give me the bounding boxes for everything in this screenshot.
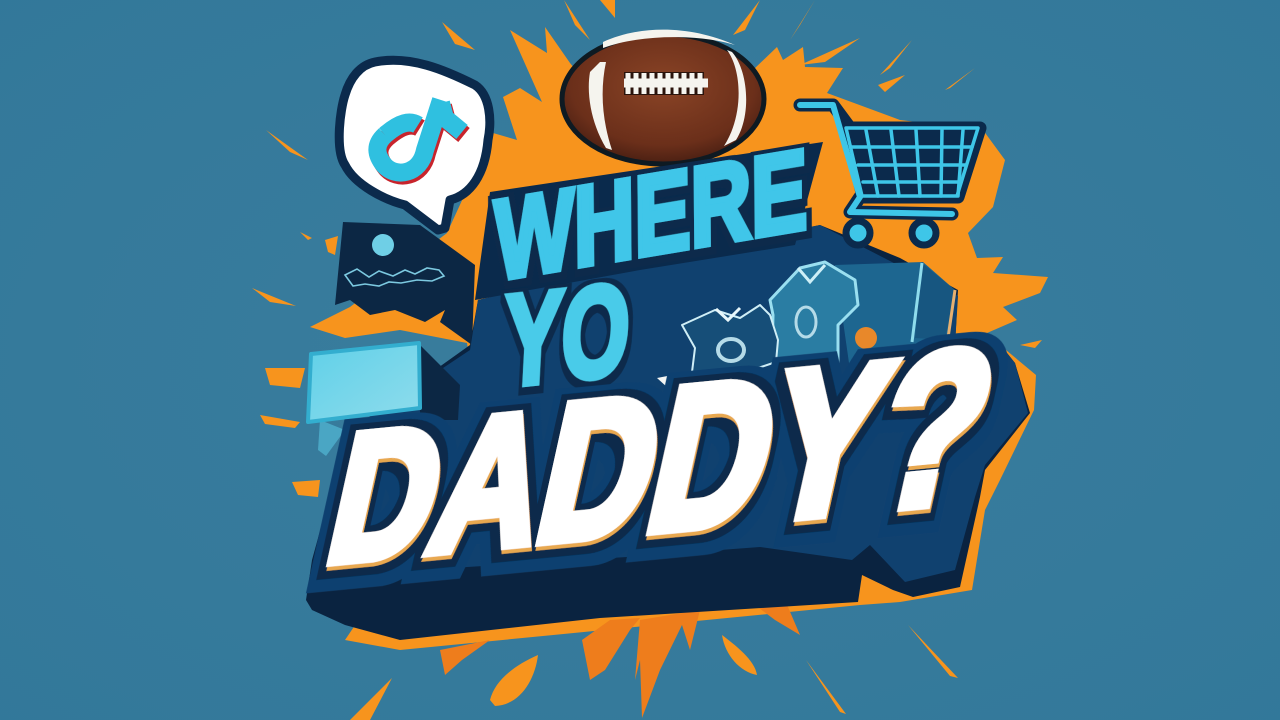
jersey: front	[657, 305, 778, 388]
icon: monitor	[308, 343, 460, 456]
title: WHERE: WHERE	[494, 126, 808, 305]
box badge	[855, 327, 877, 349]
cart wheels	[846, 221, 936, 245]
title: YO: YO	[501, 257, 633, 414]
dark base behind title	[306, 225, 1030, 640]
icon: TikTok speech bubble	[339, 60, 490, 230]
jersey: back	[770, 262, 858, 362]
panel behind WHERE	[475, 142, 823, 300]
football laces	[624, 72, 708, 95]
title: DADDY?: DADDY?	[312, 302, 1014, 609]
icon: TikTok note	[377, 100, 464, 176]
jersey crest	[796, 307, 816, 337]
jersey crest	[718, 339, 744, 361]
icon: shopping cart	[800, 105, 980, 245]
icon: football	[562, 30, 764, 164]
merchandise box	[835, 262, 955, 370]
dark monitor panel with sketches	[335, 222, 475, 345]
orange paint splash	[252, 0, 1048, 720]
